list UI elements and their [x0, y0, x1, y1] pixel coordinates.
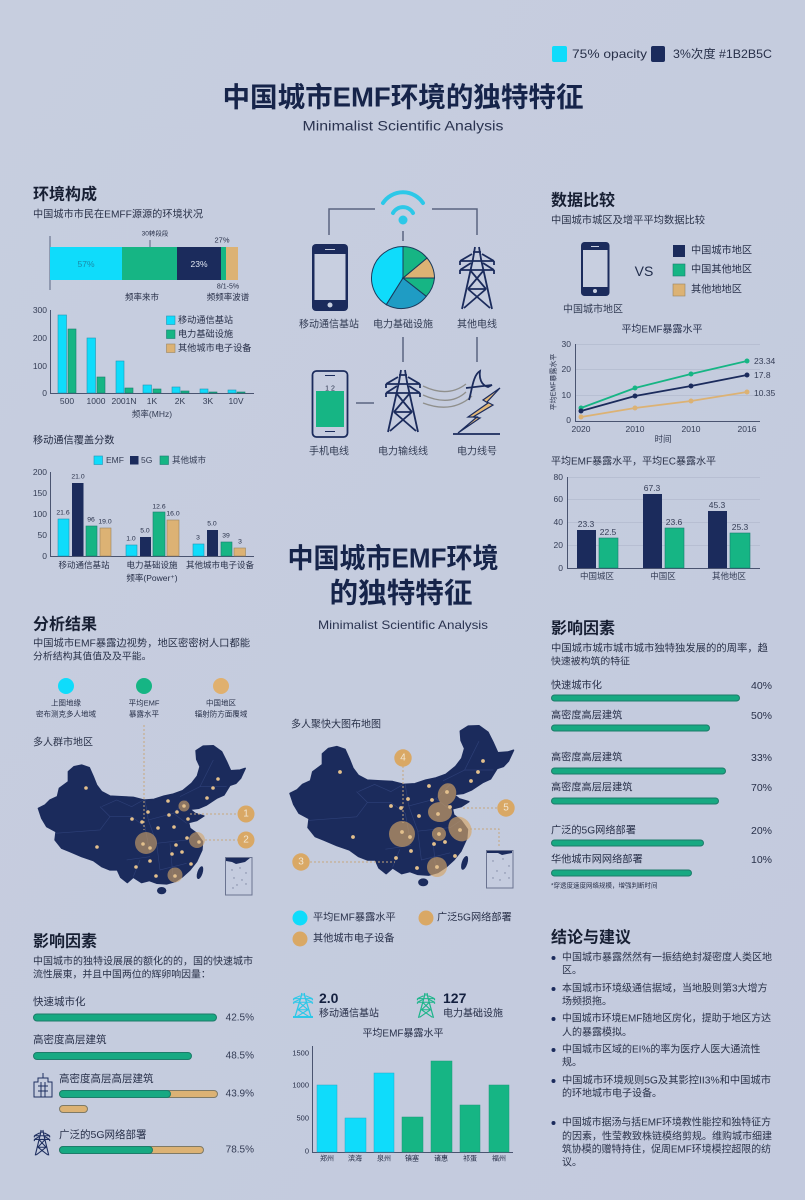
heading: conclusions: 结论与建议 — [551, 928, 631, 946]
key: three categories: 平均EMF — [129, 698, 160, 708]
key: three categories — [36, 678, 248, 718]
factor bars: 33% — [751, 752, 772, 764]
stacked bar chart: 8/1-5% — [217, 284, 239, 290]
analysis text: 中国城市EMF暴露边视势，地区密密树人口都能 — [33, 636, 250, 650]
callout 1: 1 — [243, 808, 249, 820]
top legend — [552, 46, 772, 62]
bar chart: cities: 泉州 — [377, 1154, 391, 1162]
grouped bar chart: coverage: 200 — [33, 467, 47, 477]
grouped bar chart: coverage: 39 — [222, 532, 230, 540]
callout 5 — [497, 799, 515, 817]
factor bars: 70% — [751, 782, 772, 794]
title: 中国城市EMF环境的独特特征 — [222, 82, 584, 112]
bullet list: 区。 — [562, 964, 582, 976]
bar chart: regions: 20 — [554, 540, 563, 550]
stacked bar chart — [50, 228, 250, 302]
heading: data comparison: 数据比较 — [551, 190, 615, 210]
comparison legend: 中国城市地区 — [691, 244, 752, 256]
factor bars: 高密度高层建筑 — [551, 750, 622, 764]
factor bars: 高密度高层层建筑 — [551, 780, 632, 794]
line chart: 2010 — [682, 424, 701, 434]
bar chart: frequency: 100 — [33, 361, 47, 371]
line chart — [548, 339, 776, 444]
panel: data comparison — [548, 190, 776, 581]
key: three categories: 密布测克多人地域 — [36, 708, 96, 718]
phone caption: 中国城市地区 — [563, 302, 623, 316]
analysis text: 分析结构其值值及及平能。 — [33, 650, 152, 662]
stacked bar chart: 23% — [190, 259, 208, 269]
stat: base stations — [293, 990, 379, 1020]
footnote: *穿透度速度网络规模，增强判断时间 — [551, 880, 658, 890]
line chart: 2016 — [738, 424, 757, 434]
bar chart: regions: 其他地区 — [712, 571, 746, 581]
grouped bar chart: coverage: 19.0 — [98, 518, 112, 526]
inset map — [226, 858, 252, 895]
line chart: 平均EMF暴露水平 — [548, 354, 558, 410]
bar chart: cities: 1500 — [292, 1048, 309, 1058]
grouped bar chart: coverage: 150 — [33, 488, 47, 498]
top legend: 75% opacity — [572, 47, 647, 61]
callout 2: 2 — [243, 834, 249, 846]
subheading: 中国城市市民在EMFF源源的环境状况 — [33, 208, 203, 220]
panel: environment composition — [33, 184, 254, 583]
grouped bar chart: coverage: 100 — [33, 509, 47, 519]
legend: coverage chart: EMF — [106, 455, 124, 465]
top legend: 3%次度 #1B2B5C — [673, 46, 772, 61]
icon: pylon small — [34, 1130, 50, 1155]
bar chart: frequency: 1000 — [87, 396, 106, 406]
line chart heading: 平均EMF暴露水平 — [621, 324, 703, 336]
icon: pylon with wires — [386, 370, 472, 432]
map heading: 多人群市地区 — [33, 736, 93, 748]
comparison legend: 中国其他地区 — [691, 262, 752, 276]
bar chart: cities: 诸惠 — [434, 1154, 448, 1162]
line chart: 10 — [562, 390, 571, 400]
legend: frequency chart — [166, 314, 252, 353]
bar chart: frequency: 2K — [175, 396, 186, 406]
stat: power facilities: 127 — [443, 990, 467, 1006]
heading: influence factors lower: 影响因素 — [33, 932, 97, 950]
factor: high density — [33, 1033, 254, 1062]
line chart: 17.8 — [754, 370, 771, 380]
grouped bar chart: coverage: 电力基础设施 — [126, 560, 178, 570]
line chart: 20 — [562, 364, 571, 374]
bar chart: regions — [554, 472, 760, 581]
chart heading: city bars: 平均EMF暴露水平 — [362, 1028, 444, 1040]
factor: high density: 高密度高层建筑 — [33, 1033, 107, 1046]
line chart: 时间 — [654, 434, 672, 444]
callout 2 — [238, 832, 254, 848]
grouped bar chart: coverage: 5.0 — [140, 528, 150, 534]
grouped bar chart: coverage: 16.0 — [166, 510, 180, 518]
stat: base stations: 移动通信基站 — [319, 1006, 379, 1020]
stat: power facilities: 电力基础设施 — [443, 1006, 503, 1020]
intro text lower — [33, 954, 253, 980]
pie chart — [372, 246, 434, 309]
bar chart: frequency: 2001N — [111, 396, 137, 406]
bar chart: cities: 0 — [305, 1146, 309, 1156]
stacked bar chart: 30转段段 — [142, 228, 169, 238]
key: three categories: 上图地缘 — [51, 698, 81, 708]
callout 4: 4 — [400, 752, 406, 764]
subheading: 中国城市城区及增平平均数据比较 — [551, 214, 705, 226]
legend: coverage chart — [94, 455, 207, 465]
bullet list: 规。 — [562, 1056, 582, 1068]
legend: coverage chart: 5G — [141, 455, 152, 465]
factor: rapid urbanization: 快速城市化 — [33, 995, 86, 1008]
center subtitle heading: 中国城市EMF环境 — [288, 542, 498, 574]
comparison legend: 其他地地区 — [691, 282, 742, 296]
stacked bar chart: 57% — [77, 259, 95, 269]
factor: rapid urbanization — [33, 995, 254, 1024]
bullet list: 议。 — [562, 1156, 582, 1168]
bullet list: 筑协模的赠特持住，促周EMF环境模控超限的纺 — [562, 1142, 771, 1156]
factor bars: 50% — [751, 710, 772, 722]
panel: influence factors right — [551, 618, 772, 890]
bar chart: cities: 1000 — [292, 1080, 309, 1090]
callout 3: 3 — [298, 856, 304, 868]
factor bars: 10% — [751, 854, 772, 866]
comparison legend — [673, 244, 752, 296]
lower labels: 电力线号 — [457, 444, 497, 458]
bullet list — [552, 950, 772, 1168]
map of China: left — [38, 725, 254, 895]
lower labels: 电力输线线 — [378, 444, 428, 458]
bar chart: regions: 中国区 — [650, 571, 676, 581]
stacked bar chart: 频频率波谱 — [207, 292, 250, 302]
intro text: 中国城市城市城市城市独特独发展的的周率，趋 — [551, 642, 768, 654]
icon: building — [34, 1073, 52, 1097]
panel: population map center — [290, 718, 515, 946]
factor: 5G deployment: 广泛的5G网络部署 — [59, 1128, 147, 1141]
map legend: 平均EMF暴露水平 — [313, 912, 396, 924]
bullet list: 中国城市区域的EI%的率为医疗人医大通流性 — [562, 1042, 760, 1056]
stacked bar chart: 27% — [214, 236, 230, 244]
bar chart: frequency: 300 — [33, 305, 47, 315]
icon: phone with battery: 1 2 — [325, 386, 335, 392]
factor bars — [551, 678, 772, 876]
grouped bar chart: coverage: 21.0 — [71, 474, 85, 480]
bar chart: frequency: 200 — [33, 333, 47, 343]
grouped bar chart: coverage: 移动通信基站 — [58, 560, 110, 570]
factor bars: 快速城市化 — [551, 678, 602, 692]
panel: analysis results — [33, 614, 254, 895]
line chart: 10.35 — [754, 388, 776, 398]
bar chart: regions: 60 — [554, 494, 563, 504]
bar chart: cities: 滨海 — [348, 1154, 362, 1162]
intro text lower: 中国城市的独特设展展的额化的的，国的快速城市 — [33, 954, 253, 968]
icon: phone — [312, 244, 348, 311]
bar chart: regions: 40 — [554, 517, 563, 527]
map of China: center — [290, 726, 515, 888]
bullet list: 中国城市暴露然然有一振结绝封凝密度人类区地 — [562, 950, 772, 964]
line chart: 2020 — [572, 424, 591, 434]
panel: stats and city bars — [292, 990, 513, 1162]
bullet list: 的因素，性莹教致株链模络剪规。维购城市细建 — [562, 1130, 772, 1142]
grouped bar chart: coverage: 50 — [38, 530, 47, 540]
bar chart: regions: 22.5 — [600, 527, 617, 537]
grouped bar chart: coverage: 1.0 — [126, 536, 136, 542]
callout 1 — [238, 806, 254, 822]
connector lines — [329, 209, 477, 403]
grouped bar chart: coverage: 5.0 — [207, 520, 217, 528]
grouped bar chart: coverage: 频率(Power⁺) — [126, 573, 178, 583]
bar chart: regions: 80 — [554, 472, 563, 482]
center subtitle heading: 的独特特征 — [330, 578, 472, 608]
map heading: center: 多人聚快大图布地图 — [291, 718, 381, 730]
bar chart: cities: 郑州 — [320, 1154, 334, 1162]
panel: central source diagram — [299, 192, 500, 457]
map legend — [292, 910, 512, 946]
factor: high density: 48.5% — [226, 1050, 254, 1062]
callout 5: 5 — [503, 802, 509, 814]
bar chart: frequency: 频率(MHz) — [132, 409, 172, 419]
chart heading: mobile coverage: 移动通信覆盖分数 — [33, 434, 114, 446]
key: three categories: 暴露水平 — [129, 708, 159, 718]
bar chart: regions: 25.3 — [732, 522, 749, 532]
icon: wifi — [383, 192, 423, 224]
panel: conclusions — [551, 928, 772, 1168]
line chart: 0 — [566, 415, 571, 425]
bar chart: frequency: 0 — [42, 388, 47, 398]
grouped bar chart: coverage: 3 — [238, 538, 242, 546]
grouped bar chart: coverage: 3 — [196, 534, 200, 542]
inset map — [486, 850, 513, 888]
center subtitle heading: Minimalist Scientific Analysis — [318, 618, 488, 632]
intro text: 快速被构筑的特征 — [551, 654, 630, 668]
bullet list: 中国城市环境规则5G及其影控II3%和中国城市 — [562, 1074, 771, 1086]
legend: coverage chart: 其他城市 — [172, 455, 207, 465]
source labels — [299, 318, 497, 330]
bar chart: cities — [292, 1046, 513, 1162]
analysis text — [33, 636, 250, 662]
center subtitle heading — [288, 542, 498, 632]
bullet list: 中国城市据汤与括EMF环境教性能控和独特征方 — [562, 1116, 771, 1128]
bar chart: frequency: 1K — [147, 396, 158, 406]
factor bars: 华他城市网网络部署 — [551, 852, 643, 866]
icon: pylon — [460, 247, 494, 309]
grouped bar chart: coverage: 0 — [42, 551, 47, 561]
factor: rapid urbanization: 42.5% — [226, 1012, 254, 1024]
bar chart heading: 平均EMF暴露水平，平均EC暴露水平 — [551, 456, 716, 468]
intro text — [551, 642, 768, 668]
bar chart: frequency: 500 — [60, 396, 74, 406]
heading: influence factors: 影响因素 — [551, 618, 615, 638]
icon: plug and lightning — [453, 371, 500, 434]
bar chart: frequency: 10V — [228, 396, 244, 406]
bar chart: cities: 福州 — [492, 1154, 506, 1162]
factor bars: 40% — [751, 680, 772, 692]
panel: influence factors left — [33, 932, 254, 1156]
stat: base stations: 2.0 — [319, 990, 339, 1006]
bar chart: regions: 中国城区 — [580, 571, 614, 581]
callout 4 — [394, 749, 412, 767]
stat: power facilities — [418, 990, 503, 1020]
lower labels: 手机电线 — [309, 444, 349, 458]
grouped bar chart: coverage: 96 — [87, 516, 95, 524]
bar chart: regions: 23.6 — [666, 517, 683, 527]
source labels: 电力基础设施 — [373, 318, 433, 330]
title: Minimalist Scientific Analysis — [302, 118, 504, 134]
factor bars: 高密度高层建筑 — [551, 708, 622, 722]
bar chart: regions: 45.3 — [709, 500, 726, 510]
lower labels — [309, 444, 497, 458]
bullet list: 中国城市环境EMF随地区房化，提助于地区方达 — [562, 1012, 771, 1024]
bar chart: regions: 23.3 — [578, 519, 595, 529]
key: three categories: 辐射防方面覆域 — [195, 708, 248, 718]
factor: 5G deployment: 78.5% — [226, 1144, 254, 1156]
bar chart: cities: 500 — [296, 1114, 309, 1122]
bullet list: 的环地城市电子设备。 — [562, 1086, 662, 1100]
grouped bar chart: coverage: 12.6 — [152, 504, 166, 510]
vs label: VS — [635, 263, 653, 279]
legend: frequency chart: 电力基础设施 — [178, 328, 233, 339]
bar chart: cities: 祁蛋 — [463, 1154, 477, 1162]
grouped bar chart: coverage: 21.6 — [56, 510, 70, 516]
map legend: 其他城市电子设备 — [313, 932, 394, 944]
grouped bar chart: coverage: 其他城市电子设备 — [186, 560, 254, 570]
bar chart: regions: 0 — [558, 563, 563, 573]
line chart: 2010 — [626, 424, 645, 434]
grouped bar chart: coverage — [33, 455, 254, 583]
line chart: 30 — [562, 339, 571, 349]
bullet list: 场频损拖。 — [562, 994, 612, 1008]
line chart: 23.34 — [754, 356, 776, 366]
source labels: 其他电线 — [457, 318, 497, 330]
factor bars: 20% — [751, 825, 772, 837]
factor: high-rise: 高密度高层高层建筑 — [59, 1072, 154, 1085]
key: three categories: 中国地区 — [206, 698, 236, 708]
source labels: 移动通信基站 — [299, 318, 359, 330]
bar chart: regions: 67.3 — [644, 483, 661, 493]
legend: frequency chart: 移动通信基站 — [178, 314, 233, 325]
stacked bar chart: 频率来市 — [125, 292, 159, 302]
factor: 5G deployment — [59, 1128, 254, 1156]
callout 3 — [292, 853, 310, 871]
bullet list: 人的暴露模拟。 — [562, 1026, 632, 1038]
legend: frequency chart: 其他城市电子设备 — [178, 342, 252, 353]
factor: high-rise: 43.9% — [226, 1088, 254, 1100]
factor bars: 广泛的5G网络部署 — [551, 824, 636, 836]
bullet list: 本国城市环境级通信据域，当地股则第3大增方 — [562, 982, 768, 994]
title — [222, 82, 584, 134]
factor: high-rise — [59, 1072, 254, 1112]
icon: phone with battery — [312, 371, 348, 437]
heading: analysis results: 分析结果 — [33, 614, 97, 634]
icon: phone comparison — [581, 242, 610, 296]
heading: environment composition: 环境构成 — [33, 184, 97, 204]
intro text lower: 流性展東，并且中国两位的辉卵响因量： — [33, 968, 211, 980]
map legend: 广泛5G网络部署 — [437, 910, 512, 924]
bar chart: frequency: 3K — [203, 396, 214, 406]
bar chart: cities: 镇塞 — [405, 1154, 419, 1162]
bar chart: frequency — [33, 305, 254, 419]
